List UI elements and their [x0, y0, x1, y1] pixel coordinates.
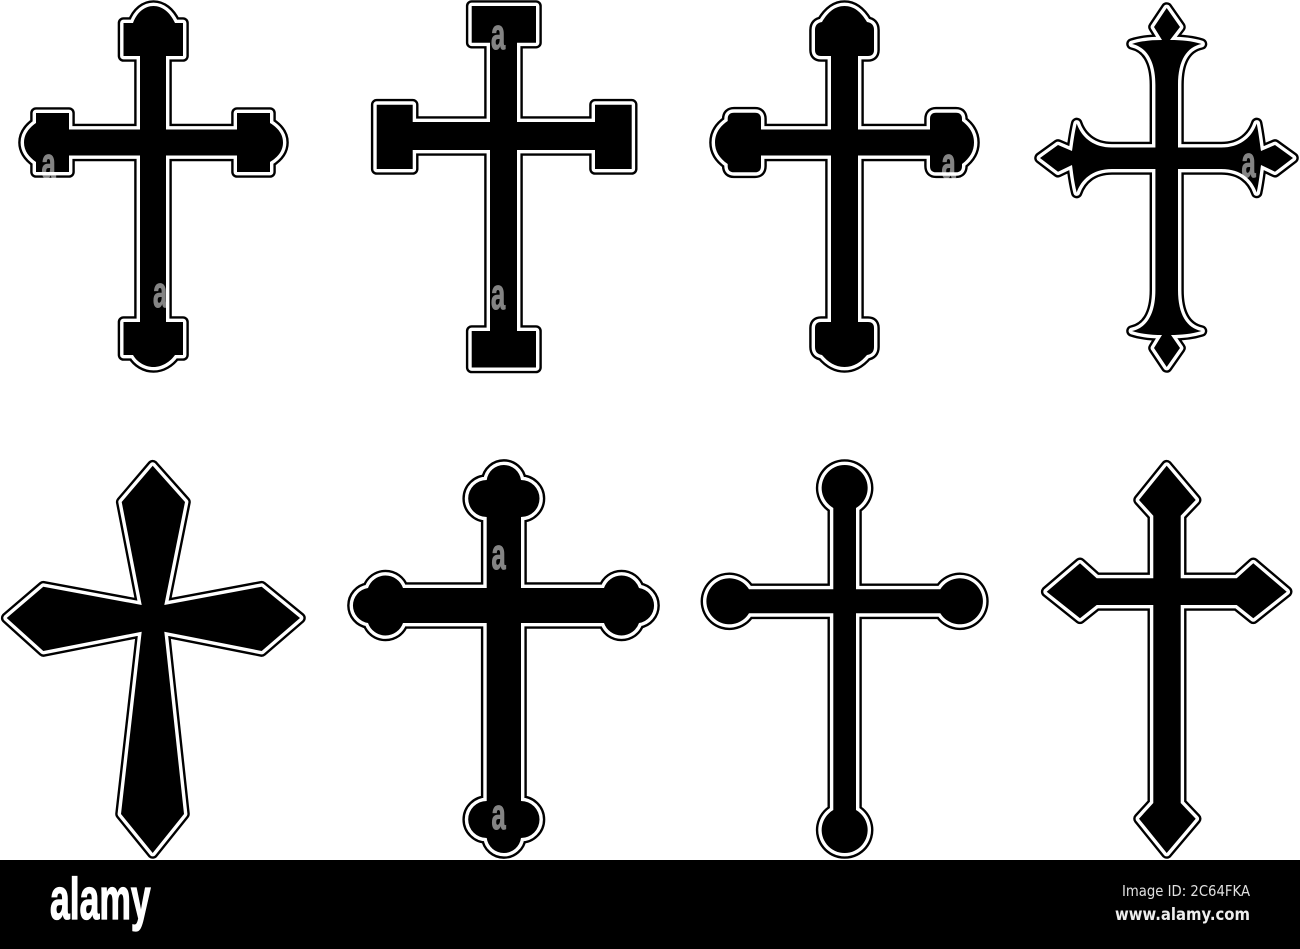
cross: flat square ends [377, 6, 632, 368]
cross: diamond arrow ends [1047, 466, 1287, 853]
cross: flared fleur ends with diamonds [1040, 8, 1293, 367]
cross: round ball ends [706, 465, 983, 853]
watermark letters: a [153, 267, 168, 317]
footer logo: alamy [50, 867, 151, 932]
image id text: Image ID: 2C64FKA [1122, 882, 1251, 900]
cross: rounded domed ends [715, 6, 974, 367]
footer bar [0, 860, 1300, 949]
watermark letters: a [1242, 137, 1256, 187]
watermark letters: a [492, 789, 506, 839]
watermark letters: a [491, 9, 506, 59]
cross: tapered pointed arms [7, 466, 300, 853]
watermark letters: a [491, 269, 506, 319]
cross: domed square ends [24, 6, 283, 367]
watermark letters: a [42, 138, 56, 188]
watermark letters: a [492, 529, 506, 579]
website text: www.alamy.com [1115, 905, 1250, 924]
watermark letters: a [942, 138, 956, 188]
cross: trefoil budded ends [353, 465, 654, 853]
